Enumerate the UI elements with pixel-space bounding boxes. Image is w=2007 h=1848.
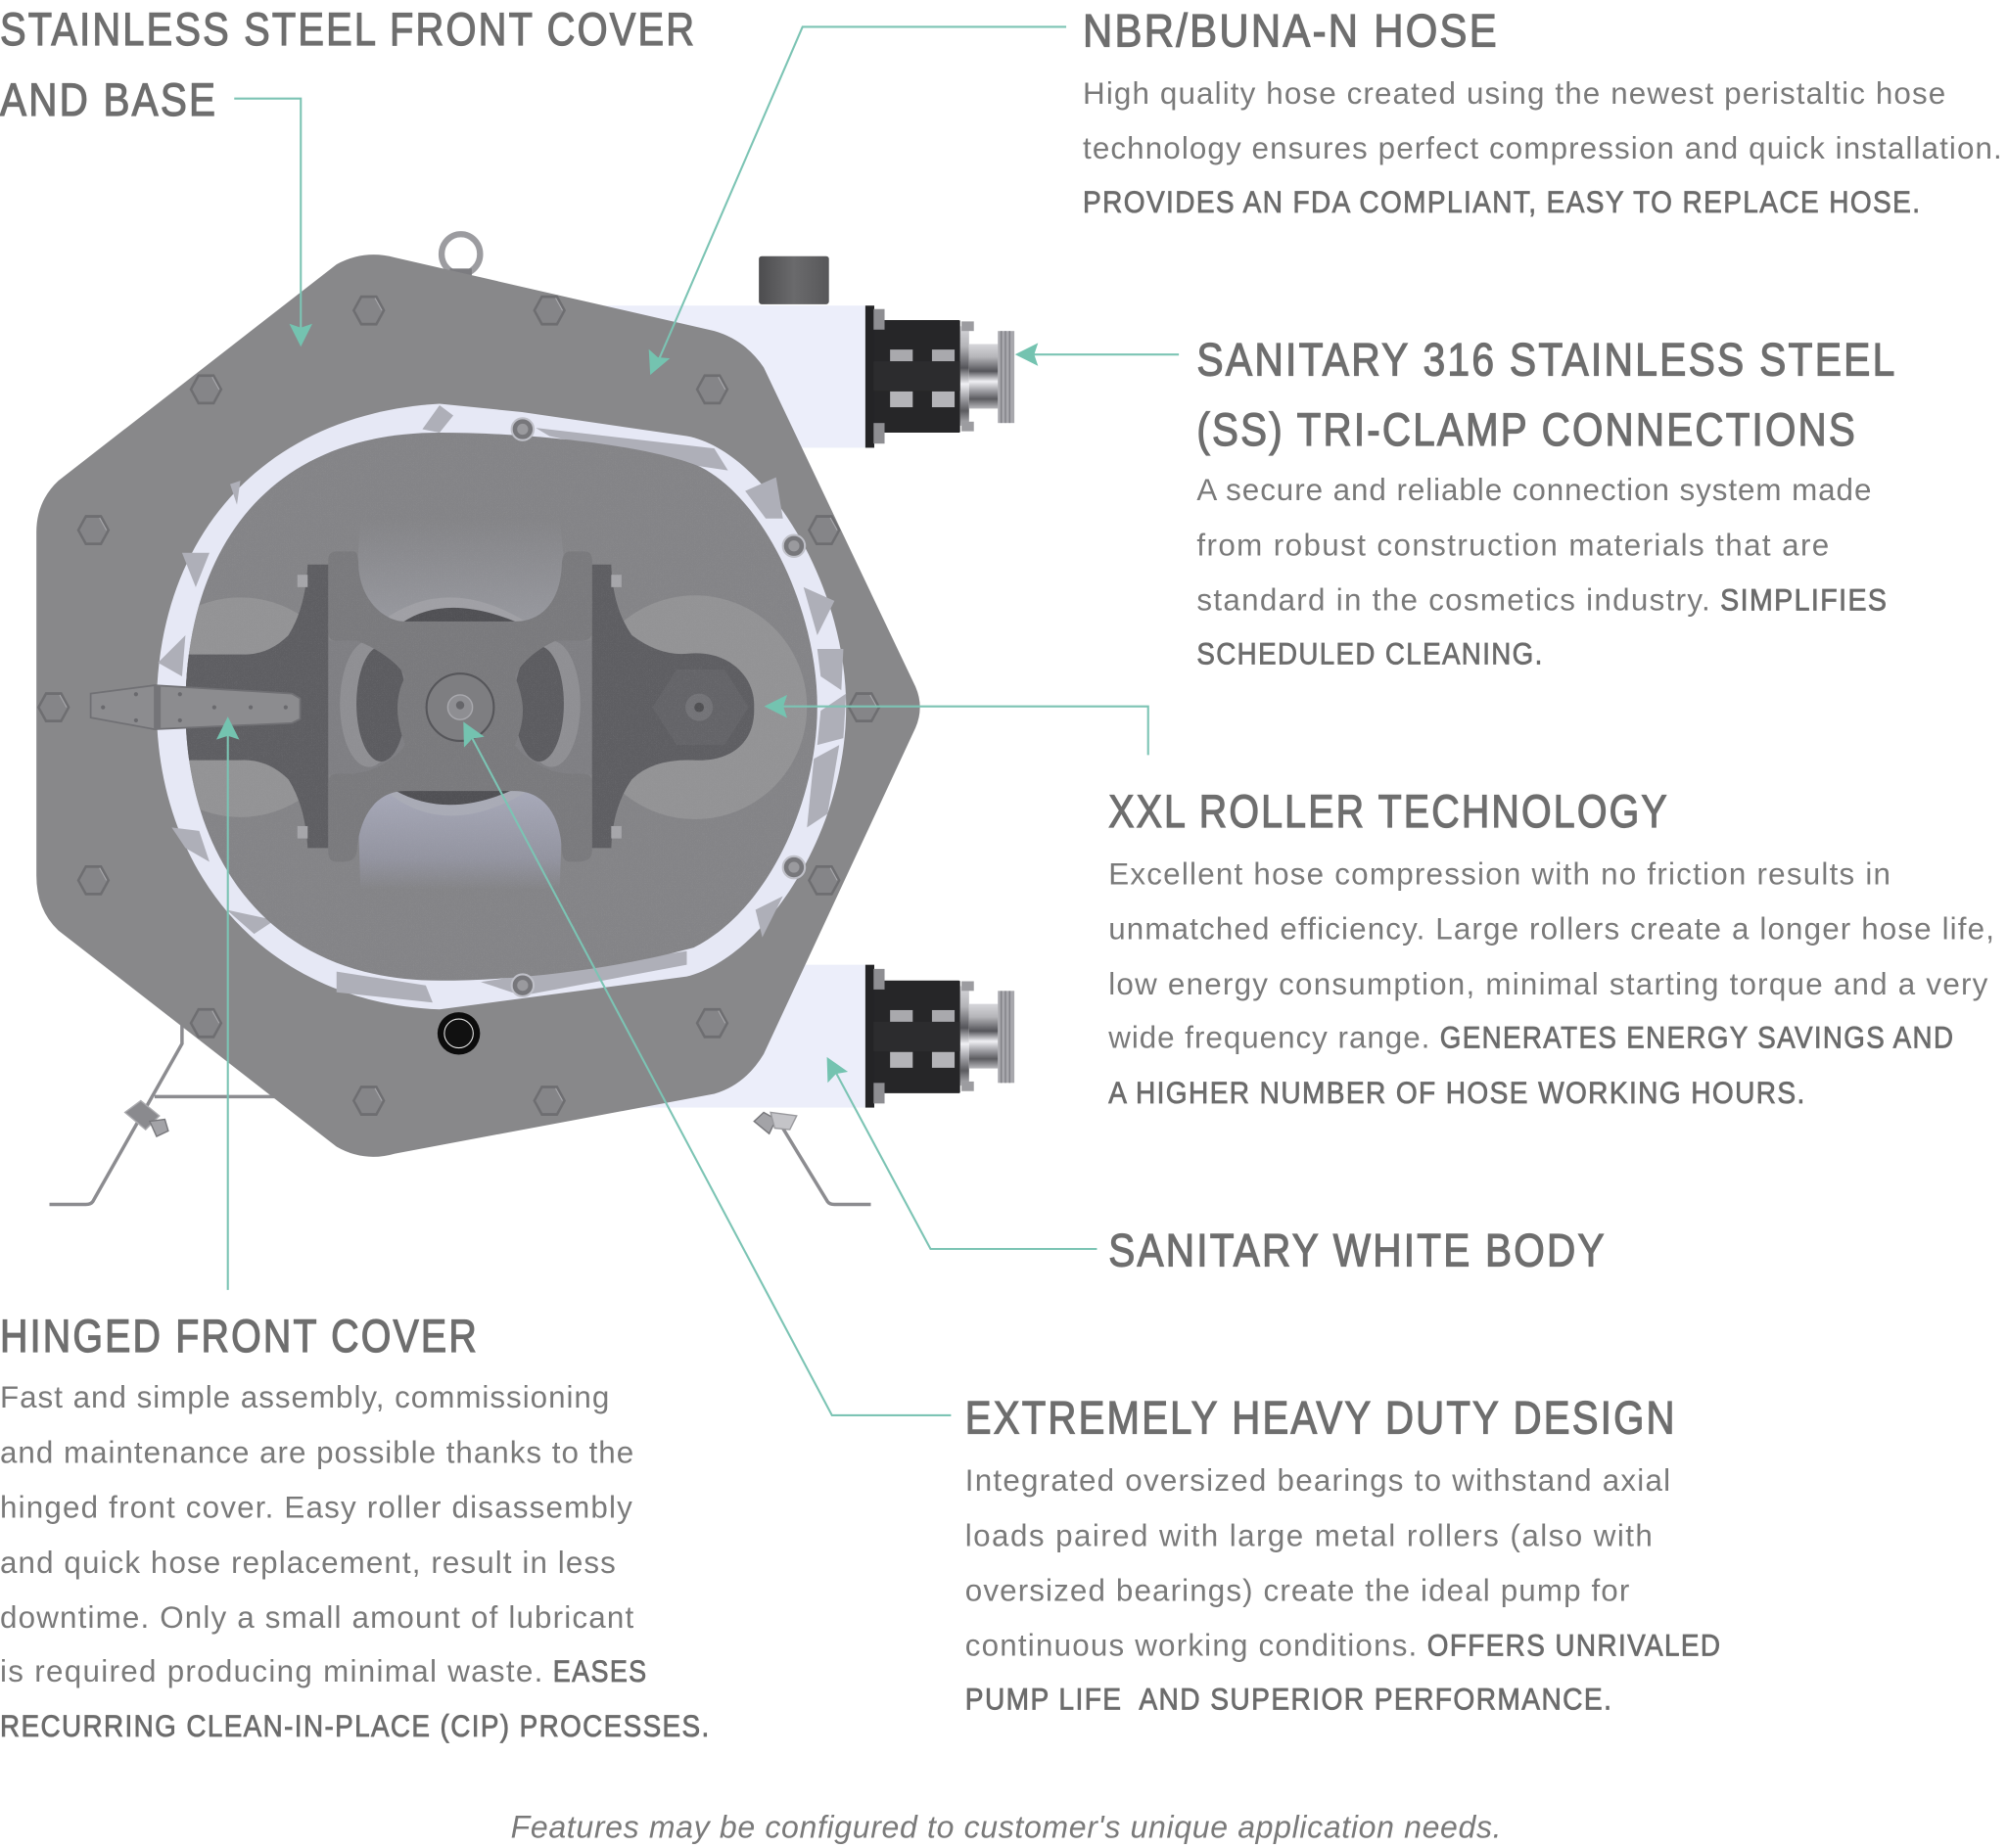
housing screws	[512, 418, 805, 996]
callout arrow: hose	[639, 26, 1066, 380]
text block: XXL roller technology: wide frequency range.	[1107, 1021, 1429, 1055]
callout arrow: roller	[765, 695, 1148, 755]
text block: XXL roller technology: XXL ROLLER TECHNOLOGY	[1108, 786, 1669, 838]
text block: NBR/Buna-N hose: PROVIDES AN FDA COMPLIANT, EASY TO REPLACE HOSE.	[1083, 185, 1921, 219]
left roller	[186, 597, 299, 817]
center rotor plate	[328, 551, 592, 861]
text block: XXL roller technology: A HIGHER NUMBER OF HOSE WORKING HOURS.	[1108, 1076, 1806, 1110]
text block: hinged front cover: and maintenance are possible thanks to the	[0, 1435, 633, 1469]
text block: XXL roller technology: unmatched efficiency. Large rollers create a longer hose life,	[1108, 912, 1994, 947]
right roller arm	[592, 565, 754, 848]
text block: hinged front cover: is required producing minimal waste.	[0, 1654, 542, 1688]
text block: XXL roller technology: low energy consumption, minimal starting torque and a very	[1108, 967, 1988, 1001]
lifting eye bolt	[442, 234, 480, 277]
pump housing interior	[185, 433, 817, 981]
ring reflections	[158, 405, 846, 1002]
text block: sanitary tri-clamp connections: (SS) TRI-CLAMP CONNECTIONS	[1196, 404, 1857, 456]
text block: extremely heavy duty design: continuous working conditions.	[965, 1629, 1417, 1663]
text block: hinged front cover: downtime. Only a small amount of lubricant	[0, 1600, 633, 1635]
callout arrow: white body	[817, 1051, 1097, 1249]
top inner crescent	[381, 597, 526, 622]
text block: sanitary tri-clamp connections	[1196, 334, 1897, 671]
right support leg	[754, 1112, 870, 1204]
text block: extremely heavy duty design: OFFERS UNRIVALED	[1427, 1629, 1721, 1663]
right roller bearing	[685, 693, 713, 721]
text block: extremely heavy duty design: oversized bearings) create the ideal pump for	[965, 1574, 1629, 1608]
text block: sanitary tri-clamp connections: standard in the cosmetics industry.	[1196, 583, 1710, 618]
white body top	[604, 305, 866, 447]
text block: sanitary tri-clamp connections: SIMPLIFIES	[1720, 583, 1888, 618]
text block: hinged front cover: and quick hose replacement, result in less	[0, 1546, 616, 1580]
front cover plate	[36, 254, 920, 1157]
text block: sanitary tri-clamp connections: from robust construction materials that are	[1196, 528, 1829, 562]
pump illustration	[36, 234, 1014, 1204]
callout arrow: front cover and base	[234, 99, 312, 346]
bottom inner fan	[358, 793, 562, 879]
text block: hinged front cover	[0, 1311, 711, 1743]
center cutouts	[328, 608, 592, 805]
heading: stainless steel front cover and base: STAINLESS STEEL FRONT COVER	[0, 4, 696, 56]
hinge	[91, 685, 301, 729]
heading: stainless steel front cover and base: AND BASE	[0, 74, 217, 126]
text block: extremely heavy duty design: PUMP LIFE AND SUPERIOR PERFORMANCE.	[965, 1683, 1612, 1717]
rotor assembly	[186, 552, 807, 879]
text block: hinged front cover: EASES	[553, 1654, 648, 1688]
text block: NBR/Buna-N hose: NBR/BUNA-N HOSE	[1083, 5, 1499, 57]
text block: NBR/Buna-N hose	[1083, 5, 2002, 219]
left roller arm	[185, 565, 328, 848]
right roller	[624, 595, 807, 819]
bottom inner crescent	[419, 809, 488, 816]
text block: sanitary tri-clamp connections: SCHEDULED CLEANING.	[1196, 637, 1544, 671]
interior grain texture	[185, 433, 817, 981]
text block: XXL roller technology: Excellent hose compression with no friction results in	[1108, 856, 1890, 891]
text block: extremely heavy duty design: loads paired with large metal rollers (also with	[965, 1518, 1653, 1552]
text block: sanitary tri-clamp connections: A secure and reliable connection system made	[1196, 473, 1871, 507]
text block: hinged front cover: HINGED FRONT COVER	[0, 1311, 479, 1363]
text block: NBR/Buna-N hose: High quality hose created using the newest peristaltic hose	[1083, 76, 1945, 111]
text block: hinged front cover: hinged front cover. Easy roller disassembly	[0, 1491, 632, 1525]
heading: sanitary white body: SANITARY WHITE BODY	[1108, 1224, 1607, 1276]
text block: XXL roller technology: GENERATES ENERGY SAVINGS AND	[1440, 1021, 1954, 1055]
top port cap	[759, 256, 829, 304]
text block: hinged front cover: RECURRING CLEAN-IN-PLACE (CIP) PROCESSES.	[0, 1709, 711, 1743]
cover opening ring	[157, 404, 846, 1009]
text block: NBR/Buna-N hose: technology ensures perfect compression and quick installation.	[1083, 131, 2002, 165]
text block: extremely heavy duty design: Integrated oversized bearings to withstand axial	[965, 1463, 1670, 1498]
footnote: Features may be configured to customer's unique application needs.	[511, 1809, 1502, 1844]
tri-clamp connection top	[865, 305, 1014, 447]
white body bottom	[604, 965, 866, 1108]
heading: stainless steel front cover and base	[0, 4, 696, 126]
callout arrow: hinged cover	[216, 716, 239, 1290]
left support leg	[50, 1023, 275, 1204]
text block: sanitary tri-clamp connections: SANITARY 316 STAINLESS STEEL	[1196, 334, 1897, 386]
rotor hub	[427, 673, 493, 741]
text block: extremely heavy duty design	[965, 1393, 1721, 1717]
drain port	[438, 1012, 480, 1055]
cover bolts	[37, 296, 880, 1116]
text block: extremely heavy duty design: EXTREMELY HEAVY DUTY DESIGN	[965, 1393, 1677, 1445]
tri-clamp connection bottom	[865, 965, 1014, 1108]
callout arrow: tri-clamp	[1015, 343, 1179, 366]
top inner region	[358, 555, 563, 621]
callout arrow: heavy duty	[453, 716, 951, 1415]
rotor studs	[298, 575, 622, 839]
text block: hinged front cover: Fast and simple assembly, commissioning	[0, 1380, 609, 1414]
text block: XXL roller technology	[1107, 786, 1994, 1110]
